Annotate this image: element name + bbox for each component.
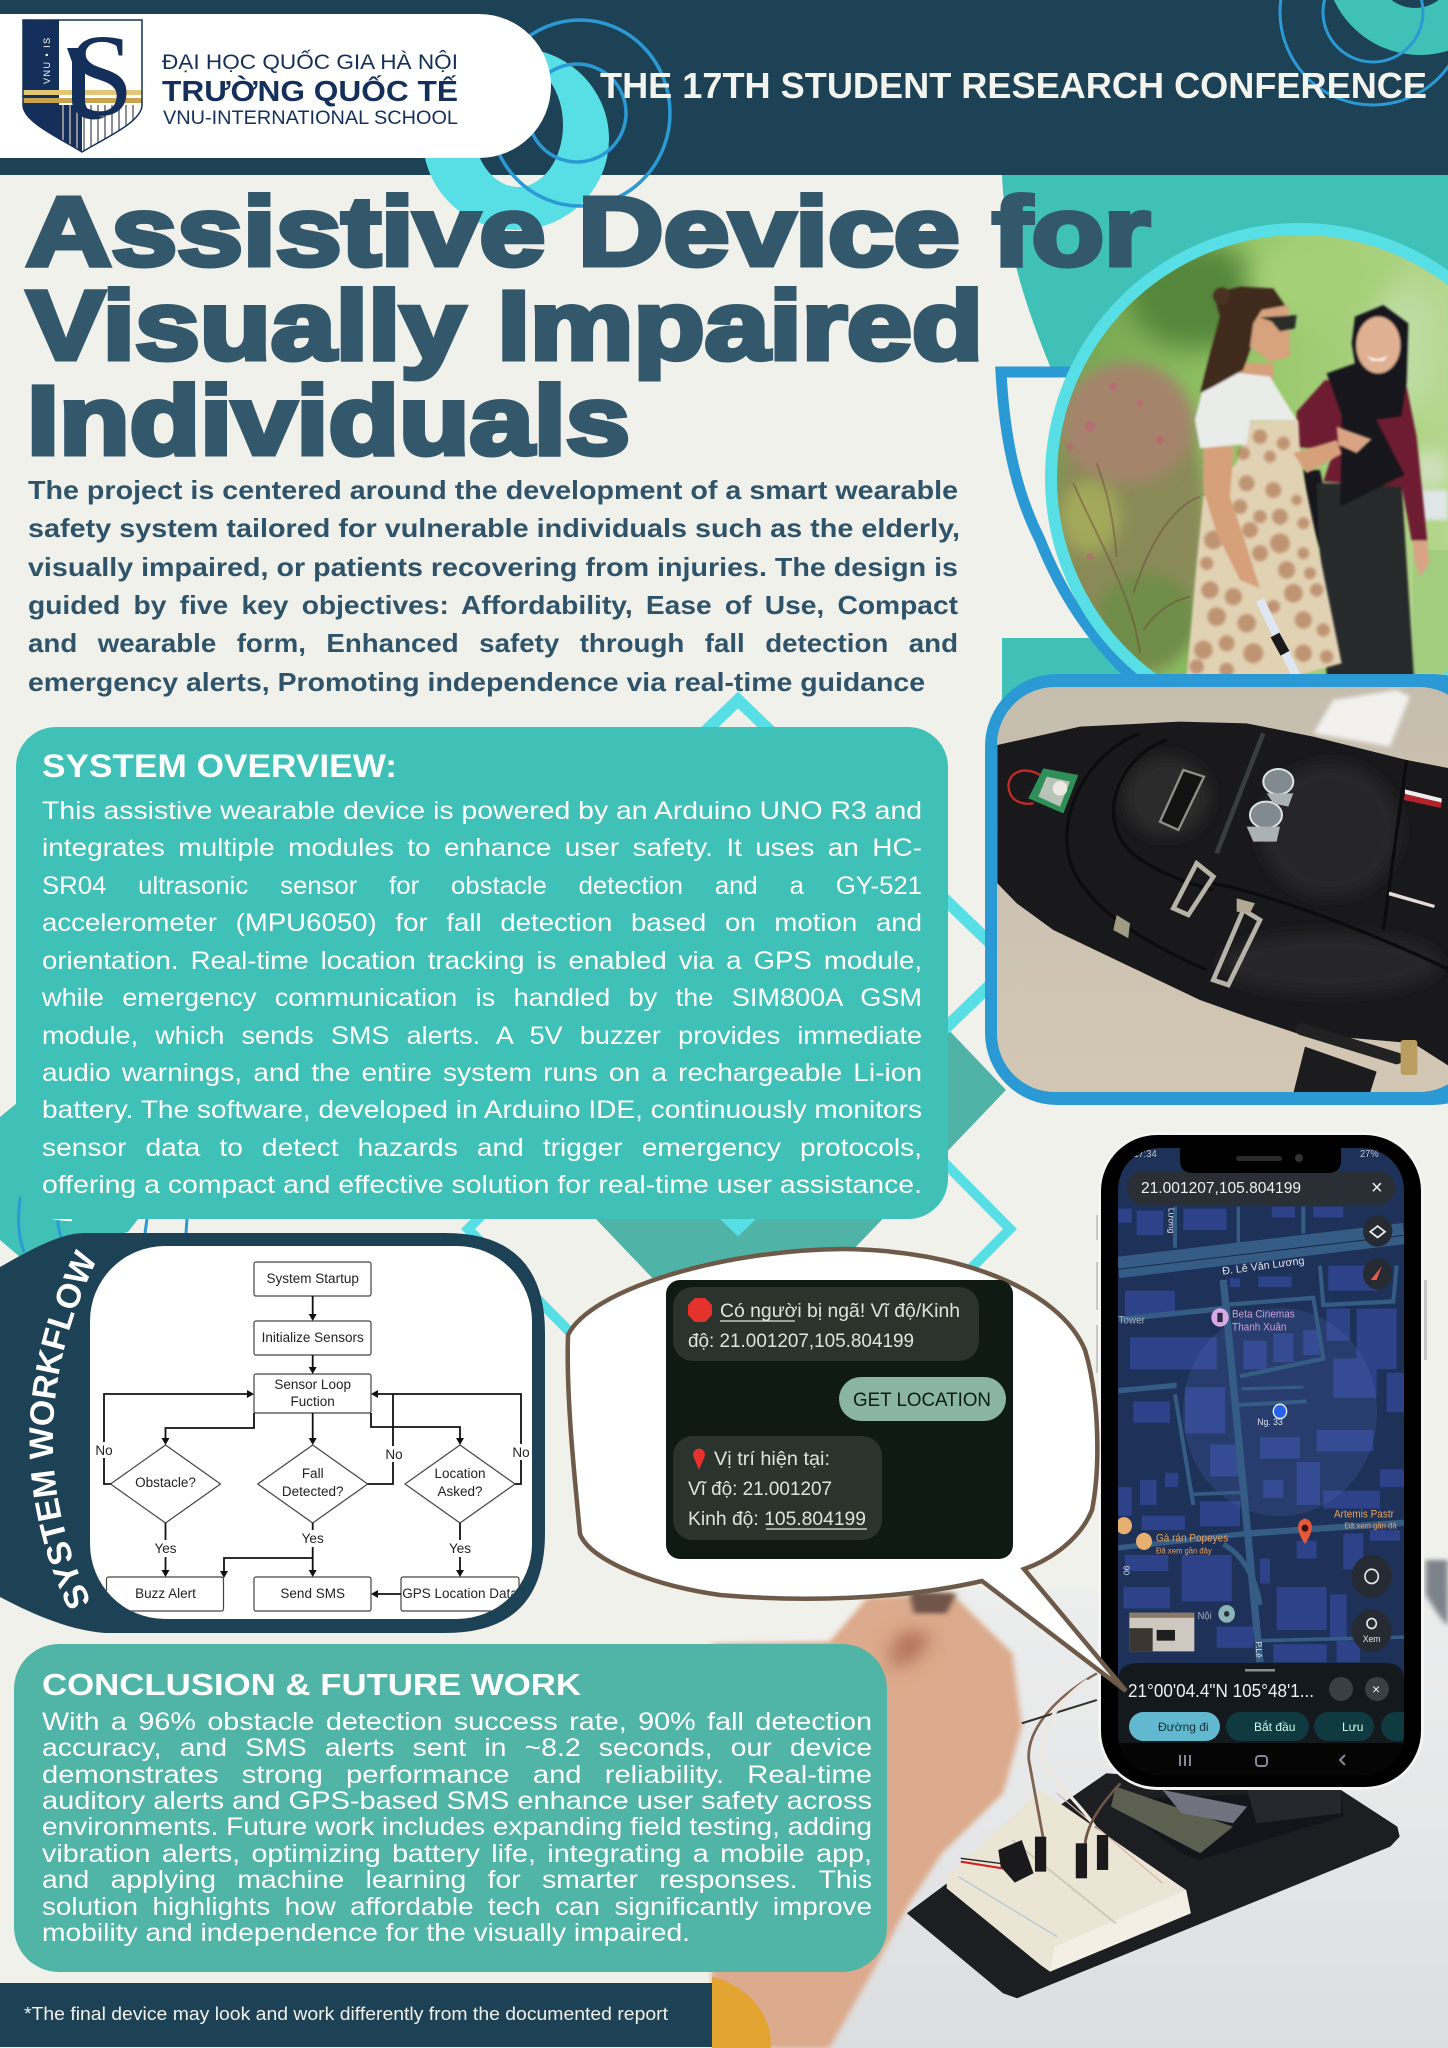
footer bar bbox=[0, 1983, 712, 2047]
flowchart bbox=[90, 1246, 532, 1619]
logo plate bbox=[1160, 770, 1204, 830]
icon: university shield logo bbox=[23, 10, 143, 155]
map labels: Beta Cinemas bbox=[1232, 1309, 1295, 1321]
photo: wearable bag device bbox=[985, 674, 1448, 1105]
phone map screen bbox=[1116, 1148, 1421, 1775]
title: Assistive Device for bbox=[26, 177, 1150, 286]
breadboard bbox=[947, 1790, 1191, 1972]
overview body text: sensor data to detect hazards and trigger emergency protocols, bbox=[42, 1134, 922, 1162]
intro paragraph: guided by five key objectives: Affordability, Ease of Use, Compact bbox=[28, 590, 958, 620]
conclusion body text: environments. Future work includes expanding field testing, adding bbox=[42, 1813, 872, 1841]
conclusion body text: mobility and independence for the visually impaired. bbox=[42, 1919, 690, 1947]
orange sleeve bbox=[712, 1977, 771, 2048]
panel: conclusion and future work bbox=[14, 1644, 887, 1972]
conclusion body text bbox=[42, 1708, 872, 1947]
conclusion body text: With a 96% obstacle detection success rate, 90% fall detection bbox=[42, 1708, 872, 1736]
search bar bbox=[1127, 1171, 1395, 1205]
sensor PCB bbox=[1028, 768, 1078, 813]
map labels: Lương bbox=[1167, 1208, 1175, 1234]
map labels: Đ. Lê Văn Lương bbox=[1222, 1256, 1305, 1278]
heading: conclusion: CONCLUSION & FUTURE WORK bbox=[42, 1667, 582, 1702]
footnote: *The final device may look and work differently from the documented report bbox=[24, 2003, 668, 2024]
message: current location: Vị trí hiện tại: bbox=[714, 1448, 830, 1470]
conclusion body text: solution highlights how affordable tech can significantly improve bbox=[42, 1893, 872, 1921]
map labels: Ng. 33 bbox=[1257, 1417, 1283, 1427]
jumper connectors bbox=[998, 1835, 1108, 1883]
title bbox=[26, 177, 1150, 475]
map labels: Artemis Pastr bbox=[1334, 1509, 1394, 1521]
overview body text: battery. The software, developed in Arduino IDE, continuously monitors bbox=[42, 1096, 922, 1124]
map buildings bbox=[1118, 1207, 1404, 1662]
flowchart labels: GPS Location Data bbox=[402, 1586, 518, 1601]
decorative teal shape top right bbox=[1002, 175, 1448, 520]
intro paragraph: The project is centered around the development of a smart wearable bbox=[28, 475, 958, 505]
overview body text: This assistive wearable device is powered by an Arduino UNO R3 and bbox=[42, 797, 922, 825]
title: Visually Impaired bbox=[27, 271, 983, 380]
map labels: Đã xem gần đây bbox=[1156, 1546, 1212, 1556]
phone map screen: 27% bbox=[1360, 1149, 1379, 1160]
search bar: × bbox=[1371, 1177, 1383, 1199]
cane bbox=[1260, 600, 1297, 677]
flowchart labels: Send SMS bbox=[280, 1586, 345, 1601]
message: get location bbox=[839, 1377, 1006, 1421]
SMS chat screenshot bbox=[666, 1280, 1013, 1559]
photo: hand with breadboard prototype bbox=[712, 1560, 1448, 2048]
zipper bbox=[1217, 733, 1263, 853]
microcontroller module bbox=[1111, 1790, 1343, 1860]
flowchart labels: Sensor Loop bbox=[274, 1377, 351, 1392]
message: fall alert: Có người bị ngã! Vĩ độ/Kinh bbox=[720, 1300, 960, 1322]
bag body bbox=[997, 722, 1448, 1067]
overview body text: audio warnings, and the entire system runs on a rechargeable Li-ion bbox=[42, 1059, 922, 1087]
conclusion body text: auditory alerts and GPS-based SMS enhance user safety across bbox=[42, 1787, 872, 1815]
flowchart labels: Detected? bbox=[282, 1484, 343, 1499]
title: Individuals bbox=[27, 366, 630, 475]
photo: two women walking bbox=[1040, 230, 1448, 726]
map labels bbox=[1116, 1208, 1397, 1658]
intro paragraph: emergency alerts, Promoting independence via real-time guidance bbox=[28, 667, 925, 697]
speech bubble bbox=[568, 1249, 1126, 1691]
overview body text: while emergency communication is handled by the SIM800A GSM bbox=[41, 984, 922, 1012]
flowchart labels: Obstacle? bbox=[135, 1475, 196, 1490]
flowchart labels: No bbox=[95, 1443, 113, 1458]
panel: system overview bbox=[16, 727, 948, 1219]
icon: university shield logo: VNU • IS bbox=[42, 36, 52, 84]
conference title: THE 17TH STUDENT RESEARCH CONFERENCE bbox=[600, 65, 1427, 106]
decorative diamond: teal filled bbox=[473, 810, 1006, 1369]
map labels: Gà rán Popeyes bbox=[1156, 1533, 1228, 1545]
phone map screen: Xem bbox=[1363, 1634, 1381, 1644]
flowchart labels: No bbox=[385, 1447, 403, 1462]
message: current location bbox=[673, 1436, 882, 1540]
bottom sheet: × bbox=[1372, 1681, 1380, 1697]
flowchart labels: No bbox=[512, 1445, 530, 1460]
map roads bbox=[1118, 1207, 1404, 1662]
intro paragraph: visually impaired, or patients recovering from injuries. The design is bbox=[28, 552, 958, 582]
woman 1 bbox=[1187, 287, 1372, 677]
phone mockup bbox=[1096, 1132, 1427, 1790]
decorative teal square bbox=[1002, 638, 1172, 708]
logo text bbox=[162, 50, 458, 129]
vertical heading: system workflow: SYSTEM WORKFLOW bbox=[29, 1248, 95, 1608]
black base plate bbox=[907, 1773, 1400, 1998]
overview body text: offering a compact and effective solution for real-time user assistance. bbox=[42, 1171, 922, 1199]
overview body text: SR04 ultrasonic sensor for obstacle detection and a GY-521 bbox=[42, 872, 922, 900]
message: get location: GET LOCATION bbox=[853, 1390, 991, 1411]
decorative teal shape left bbox=[0, 1100, 187, 1257]
conclusion body text: vibration alerts, optimizing battery life, integrating a mobile app, bbox=[42, 1840, 872, 1868]
panel: system workflow bbox=[0, 1233, 545, 1633]
message: fall alert bbox=[673, 1287, 979, 1361]
message: fall alert: độ: 21.001207,105.804199 bbox=[688, 1330, 914, 1352]
decorative ring: top right bbox=[1280, 0, 1448, 105]
conclusion body text: accuracy, and SMS alerts sent in ~8.2 seconds, our device bbox=[42, 1734, 872, 1762]
map labels: Nội bbox=[1198, 1611, 1212, 1622]
map round buttons bbox=[1352, 1215, 1392, 1652]
decorative diamond: cyan outline lower bbox=[468, 955, 1010, 1503]
map labels: P.Lê bbox=[1254, 1641, 1263, 1658]
map thumbnail bbox=[1129, 1613, 1194, 1651]
overview body text: integrates multiple modules to enhance user safety. It uses an HC- bbox=[42, 834, 922, 862]
bottom sheet: Bắt đầu bbox=[1254, 1719, 1295, 1734]
intro paragraph bbox=[28, 475, 960, 697]
wires bbox=[961, 1673, 1120, 1870]
bottom sheet bbox=[1118, 1663, 1421, 1775]
flowchart labels: Buzz Alert bbox=[135, 1586, 196, 1601]
status bar: 17:34 bbox=[1133, 1149, 1157, 1160]
flowchart labels: Yes bbox=[449, 1541, 471, 1556]
overview body text: accelerometer (MPU6050) for fall detection based on motion and bbox=[42, 909, 922, 937]
bush bbox=[1053, 363, 1207, 677]
flowchart labels bbox=[92, 1271, 532, 1601]
ultrasonic sensor cups bbox=[1250, 769, 1293, 828]
map labels: Tower bbox=[1118, 1315, 1146, 1327]
overview body text: orientation. Real-time location tracking is enabled via a GPS module, bbox=[42, 947, 922, 975]
flowchart labels: Fall bbox=[302, 1466, 324, 1481]
bottom sheet: Lưu bbox=[1342, 1720, 1363, 1734]
cream backdrop bbox=[712, 1590, 872, 1647]
hand and arm bbox=[712, 1593, 1022, 2048]
map labels: Đã xem gần đâ bbox=[1345, 1521, 1397, 1531]
logo pill bbox=[0, 10, 551, 158]
map accuracy circle bbox=[1183, 1309, 1377, 1516]
flowchart labels: Location bbox=[434, 1466, 486, 1481]
woman 2 bbox=[1296, 305, 1429, 677]
logo text: VNU-INTERNATIONAL SCHOOL bbox=[163, 108, 458, 129]
flowchart labels: Yes bbox=[154, 1541, 177, 1556]
antenna bbox=[1302, 1029, 1397, 1058]
map labels: 90 bbox=[1121, 1566, 1130, 1576]
intro paragraph: and wearable form, Enhanced safety through fall detection and bbox=[28, 628, 958, 658]
logo monogram: S bbox=[68, 10, 134, 141]
flowchart labels: Fuction bbox=[291, 1394, 335, 1409]
dark object at right bbox=[1425, 1560, 1448, 1627]
decorative diamond: cyan outline upper bbox=[464, 700, 1012, 1228]
decorative ring: cyan header ring bbox=[423, 48, 609, 230]
decorative ring: thin blue circles bbox=[490, 20, 670, 206]
overview body text bbox=[41, 797, 922, 1199]
flowchart labels: Asked? bbox=[437, 1484, 483, 1499]
flowchart connectors bbox=[104, 1296, 521, 1594]
intro paragraph: safety system tailored for vulnerable individuals such as the elderly, bbox=[28, 513, 960, 543]
logo text: ĐẠI HỌC QUỐC GIA HÀ NỘI bbox=[162, 50, 458, 74]
pocket seams bbox=[1067, 733, 1448, 970]
conclusion body text: and applying machine learning for smarter responses. This bbox=[42, 1866, 872, 1894]
flowchart labels: System Startup bbox=[267, 1271, 359, 1286]
bottom sheet: Đường đi bbox=[1158, 1720, 1209, 1734]
flowchart labels: Initialize Sensors bbox=[262, 1330, 364, 1345]
message: current location: Kinh độ: 105.804199 bbox=[688, 1508, 866, 1530]
conclusion body text: demonstrates strong performance and reliability. Real-time bbox=[42, 1761, 872, 1789]
foliage background bbox=[1127, 243, 1267, 350]
logo text: TRƯỜNG QUỐC TẾ bbox=[162, 74, 458, 108]
zipper pulls bbox=[1173, 863, 1260, 985]
search bar: 21.001207,105.804199 bbox=[1141, 1180, 1301, 1197]
bottom sheet: 21°00'04.4"N 105°48'1... bbox=[1128, 1680, 1314, 1701]
heading: system overview: SYSTEM OVERVIEW: bbox=[42, 748, 397, 784]
flowchart arrowheads bbox=[162, 1314, 464, 1598]
message: current location: Vĩ độ: 21.001207 bbox=[688, 1478, 832, 1500]
decorative blue frame bbox=[1001, 372, 1140, 684]
header band bbox=[0, 0, 1448, 175]
map labels: Thanh Xuân bbox=[1232, 1322, 1287, 1334]
decorative cream area left of photo bbox=[1000, 372, 1170, 638]
flowchart labels: Yes bbox=[302, 1531, 324, 1546]
strap bbox=[1293, 1047, 1377, 1093]
overview body text: module, which sends SMS alerts. A 5V buzzer provides immediate bbox=[42, 1022, 922, 1050]
stripes bbox=[1405, 789, 1442, 803]
phone notch bbox=[1180, 1148, 1341, 1173]
